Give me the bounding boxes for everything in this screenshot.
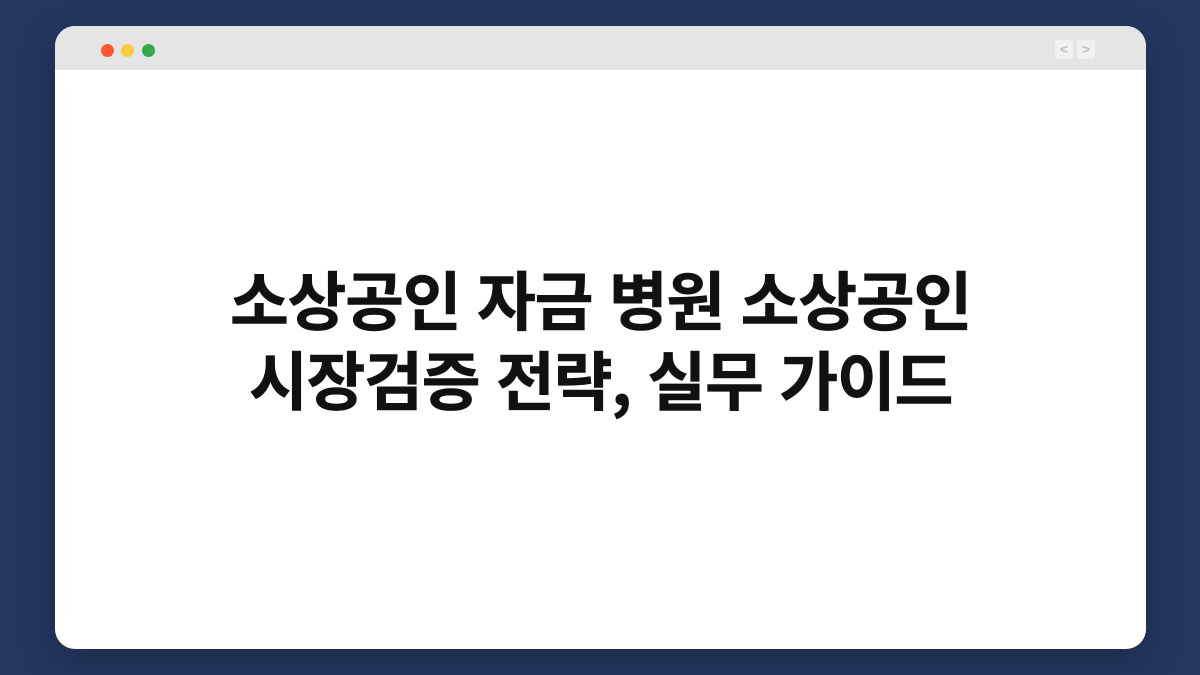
title <box>230 252 971 424</box>
icon: forward button <box>1077 40 1095 59</box>
icon: green window dot <box>142 44 155 57</box>
title: 소상공인 자금 병원 소상공인 <box>230 252 971 344</box>
icon: yellow window dot <box>121 44 134 57</box>
icon: red window dot <box>101 44 114 57</box>
browser title bar <box>55 26 1146 70</box>
icon: forward button: > <box>1082 41 1090 57</box>
icon: back button <box>1055 40 1073 59</box>
title: 시장검증 전략, 실무 가이드 <box>249 332 952 424</box>
icon: back button: < <box>1060 41 1068 57</box>
